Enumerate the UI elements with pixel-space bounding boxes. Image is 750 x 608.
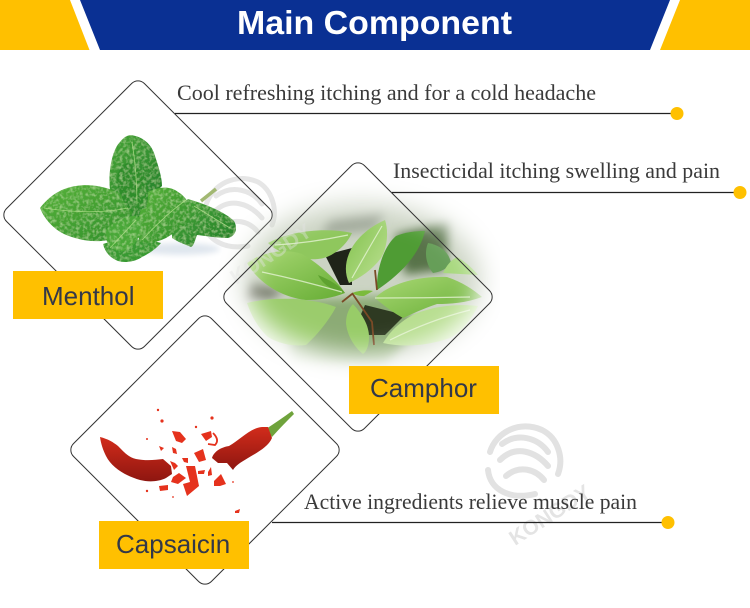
- end dot: [670, 107, 684, 120]
- callout: camphor: [392, 158, 746, 199]
- end dot: [662, 516, 674, 529]
- watermark text: lower: KONGDY: [505, 481, 595, 550]
- chili stem: [266, 411, 294, 437]
- mint midribs: [44, 142, 230, 248]
- front leaf: [106, 216, 142, 251]
- right chili: [212, 427, 272, 470]
- diamond frame: camphor: [220, 159, 496, 435]
- label: capsaicin: Capsaicin: [116, 529, 230, 559]
- right front leaf: [137, 188, 190, 243]
- leader line: [392, 192, 740, 194]
- title: Main Component: [237, 4, 512, 41]
- mint stem tip: [201, 189, 216, 201]
- dark gaps: [325, 248, 352, 285]
- stems: [342, 270, 377, 345]
- watermark: upper logo: [204, 179, 274, 247]
- label: capsaicin: [99, 521, 249, 569]
- left yellow tab: [0, 0, 90, 50]
- central fill: [115, 190, 160, 240]
- left leaf: [40, 185, 133, 241]
- label: menthol: Menthol: [42, 281, 134, 311]
- description: Cool refreshing itching and for a cold headache: [177, 80, 596, 105]
- back-right leaf: [172, 199, 236, 247]
- chili fragments: [146, 409, 240, 513]
- left chili: [100, 437, 172, 481]
- callout: menthol: [175, 80, 684, 120]
- foliage background: [227, 191, 492, 366]
- description: Active ingredients relieve muscle pain: [304, 489, 637, 514]
- leaves: [268, 230, 352, 259]
- blue title bar: [80, 0, 670, 50]
- right yellow tab: [660, 0, 750, 50]
- centre leaf: [117, 163, 148, 212]
- end dot: [734, 186, 746, 199]
- camphor leaves photo: [227, 191, 492, 370]
- mint shadow: [140, 243, 220, 255]
- watermark text: upper: KONGDY: [226, 220, 316, 289]
- top leaf: [109, 135, 162, 208]
- leader line: [175, 112, 677, 114]
- diamond frame: capsaicin: [67, 312, 343, 588]
- callout: capsaicin: [272, 489, 674, 529]
- label: camphor: [349, 366, 499, 414]
- header banner: [0, 0, 750, 50]
- label: menthol: [13, 271, 163, 319]
- watermark: lower logo: [488, 426, 560, 496]
- diamond frame: menthol: [0, 77, 276, 353]
- mint leaves: [40, 135, 236, 262]
- bottom leaf: [103, 239, 161, 262]
- label: camphor: Camphor: [370, 373, 477, 403]
- leaf highlights: [262, 226, 470, 340]
- mint illustration: [40, 135, 236, 262]
- blurred shadows: [245, 212, 450, 365]
- description: Insecticidal itching swelling and pain: [393, 158, 720, 183]
- leader line: [272, 522, 668, 524]
- chili illustration: [100, 409, 294, 513]
- chili curl: [208, 433, 217, 445]
